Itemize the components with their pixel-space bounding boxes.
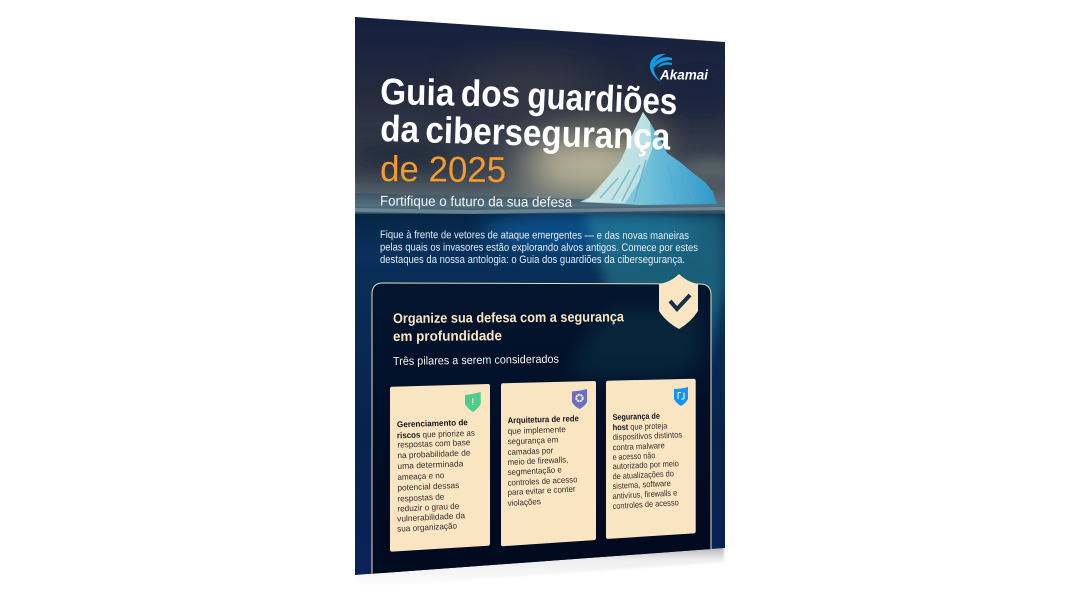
card text: host que proteja bbox=[612, 420, 668, 432]
card text: controles de acesso bbox=[507, 474, 578, 488]
card text: uma determinada bbox=[397, 458, 464, 471]
panel heading bbox=[394, 312, 624, 344]
intro paragraph bbox=[380, 229, 699, 266]
panel subheading: Três pilares a serem considerados bbox=[393, 354, 559, 368]
card: risk management bbox=[390, 384, 490, 552]
icon: cream shield with check bbox=[659, 274, 698, 329]
card text: e acesso não bbox=[612, 450, 656, 462]
page shadow bbox=[356, 547, 724, 588]
card text: Segurança de bbox=[612, 411, 660, 422]
panel heading: Organize sua defesa com a segurança bbox=[393, 308, 624, 326]
title: guardiões bbox=[527, 75, 678, 122]
card text: riscos que priorize as bbox=[397, 428, 475, 440]
icon: green shield bbox=[465, 392, 481, 412]
card text: antivírus, firewalls e bbox=[612, 487, 678, 501]
panel heading: em profundidade bbox=[393, 327, 502, 344]
title: Guia dos bbox=[380, 71, 521, 115]
card text: ameaça e no bbox=[397, 470, 445, 482]
card text: dispositivos distintos bbox=[612, 429, 682, 442]
card: host security bbox=[606, 379, 696, 539]
card text: potencial dessas bbox=[397, 480, 460, 493]
card text: violações bbox=[507, 496, 541, 508]
title: da cibersegurança bbox=[380, 108, 671, 158]
card text: sua organização bbox=[397, 520, 458, 534]
subtitle: Fortifique o futuro da sua defesa bbox=[380, 193, 572, 210]
card text: meio de firewalls, bbox=[507, 454, 568, 467]
card text bbox=[612, 411, 682, 511]
logo: Akamai: Akamai bbox=[659, 66, 709, 82]
title bbox=[382, 78, 676, 156]
card text: autorizado por meio bbox=[612, 458, 679, 471]
card text: que implemente bbox=[507, 424, 566, 436]
card text bbox=[397, 417, 475, 534]
intro paragraph: destaques da nossa antologia: o Guia dos guardiões da cibersegurança. bbox=[380, 254, 685, 266]
sky background bbox=[355, 17, 725, 203]
intro paragraph: Fique à frente de vetores de ataque emergentes — e das novas maneiras bbox=[380, 229, 690, 242]
card text: de atualizações do bbox=[612, 468, 674, 481]
card text: Gerenciamento de bbox=[397, 417, 468, 429]
card text: controles de acesso bbox=[612, 497, 679, 511]
card text: Arquitetura de rede bbox=[507, 413, 579, 425]
card: network architecture bbox=[501, 381, 596, 546]
title year: de 2025 bbox=[380, 148, 506, 190]
icon: purple shield bbox=[572, 389, 587, 409]
card text: camadas por bbox=[507, 445, 554, 457]
card text: contra malware bbox=[612, 440, 665, 452]
card text: sistema, software bbox=[612, 478, 671, 491]
card text: reduzir o grau de bbox=[397, 501, 460, 514]
icon: blue shield bbox=[674, 387, 688, 406]
iceberg glow in panel bbox=[570, 310, 700, 378]
card text bbox=[507, 413, 579, 508]
intro paragraph: pelas quais os invasores estão explorando alvos antigos. Comece por estes bbox=[380, 242, 699, 254]
iceberg bbox=[580, 112, 717, 205]
underwater background bbox=[355, 205, 725, 580]
card text: respostas com base bbox=[397, 437, 471, 450]
cover page bbox=[345, 17, 740, 580]
card text: respostas de bbox=[397, 491, 445, 504]
logo: Akamai bbox=[650, 54, 709, 82]
icon: green shield: ! bbox=[471, 397, 474, 407]
card text: vulnerabilidade da bbox=[397, 510, 466, 524]
card text: segurança em bbox=[507, 434, 558, 446]
card text: segmentação e bbox=[507, 464, 562, 477]
panel: defense in depth bbox=[372, 283, 711, 580]
water surface bbox=[355, 193, 725, 214]
card text: na probabilidade de bbox=[397, 447, 471, 460]
card text: para evitar e conter bbox=[507, 484, 576, 497]
